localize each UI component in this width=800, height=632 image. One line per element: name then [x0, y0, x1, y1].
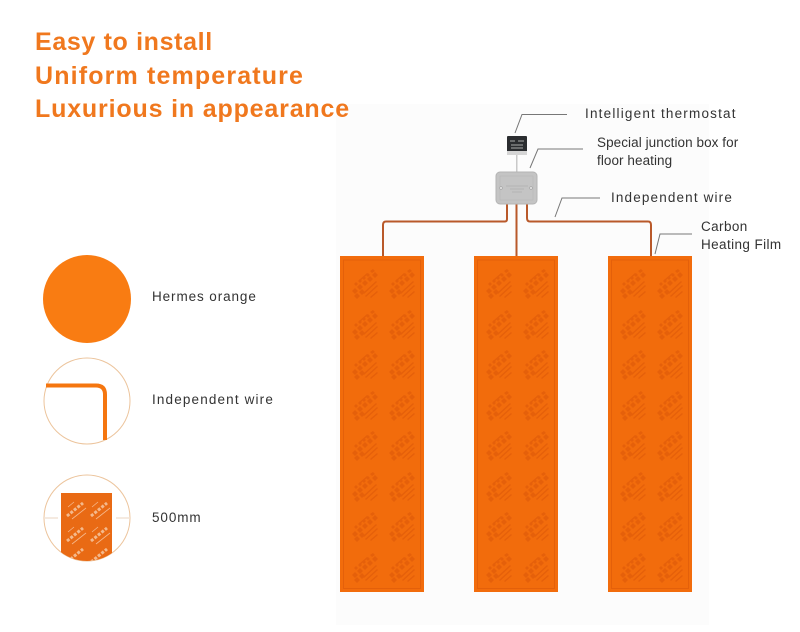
label: junction box — [597, 135, 738, 168]
swatch: Hermes orange — [43, 255, 131, 343]
label: 500mm: 500mm — [152, 510, 202, 525]
title — [35, 28, 350, 123]
label: Intelligent thermostat: Intelligent thermostat — [585, 106, 737, 121]
label: junction box: floor heating — [597, 153, 672, 168]
icon: thermostat — [507, 136, 527, 174]
title line 3: Luxurious in appearance — [35, 95, 350, 123]
icon: wires — [383, 203, 651, 256]
title line 1: Easy to install — [35, 28, 213, 56]
label: Carbon Heating Film — [701, 219, 782, 252]
label: junction box: Special junction box for — [597, 135, 738, 150]
swatch: 500mm film — [44, 475, 130, 563]
label: Carbon Heating Film: Heating Film — [701, 237, 782, 252]
heating film 1 — [340, 256, 424, 592]
swatch: independent wire — [44, 358, 130, 444]
heating film 2 — [474, 256, 558, 592]
background panel — [336, 104, 709, 625]
label: Independent wire swatch: Independent wire — [152, 392, 274, 407]
heating film 3 — [608, 256, 692, 592]
label: Independent wire: Independent wire — [611, 190, 733, 205]
main diagram — [43, 114, 692, 592]
title line 2: Uniform temperature — [35, 62, 304, 90]
label: Carbon Heating Film: Carbon — [701, 219, 748, 234]
label: Hermes orange: Hermes orange — [152, 289, 257, 304]
icon: junction box — [496, 172, 537, 204]
leader lines — [515, 114, 692, 254]
